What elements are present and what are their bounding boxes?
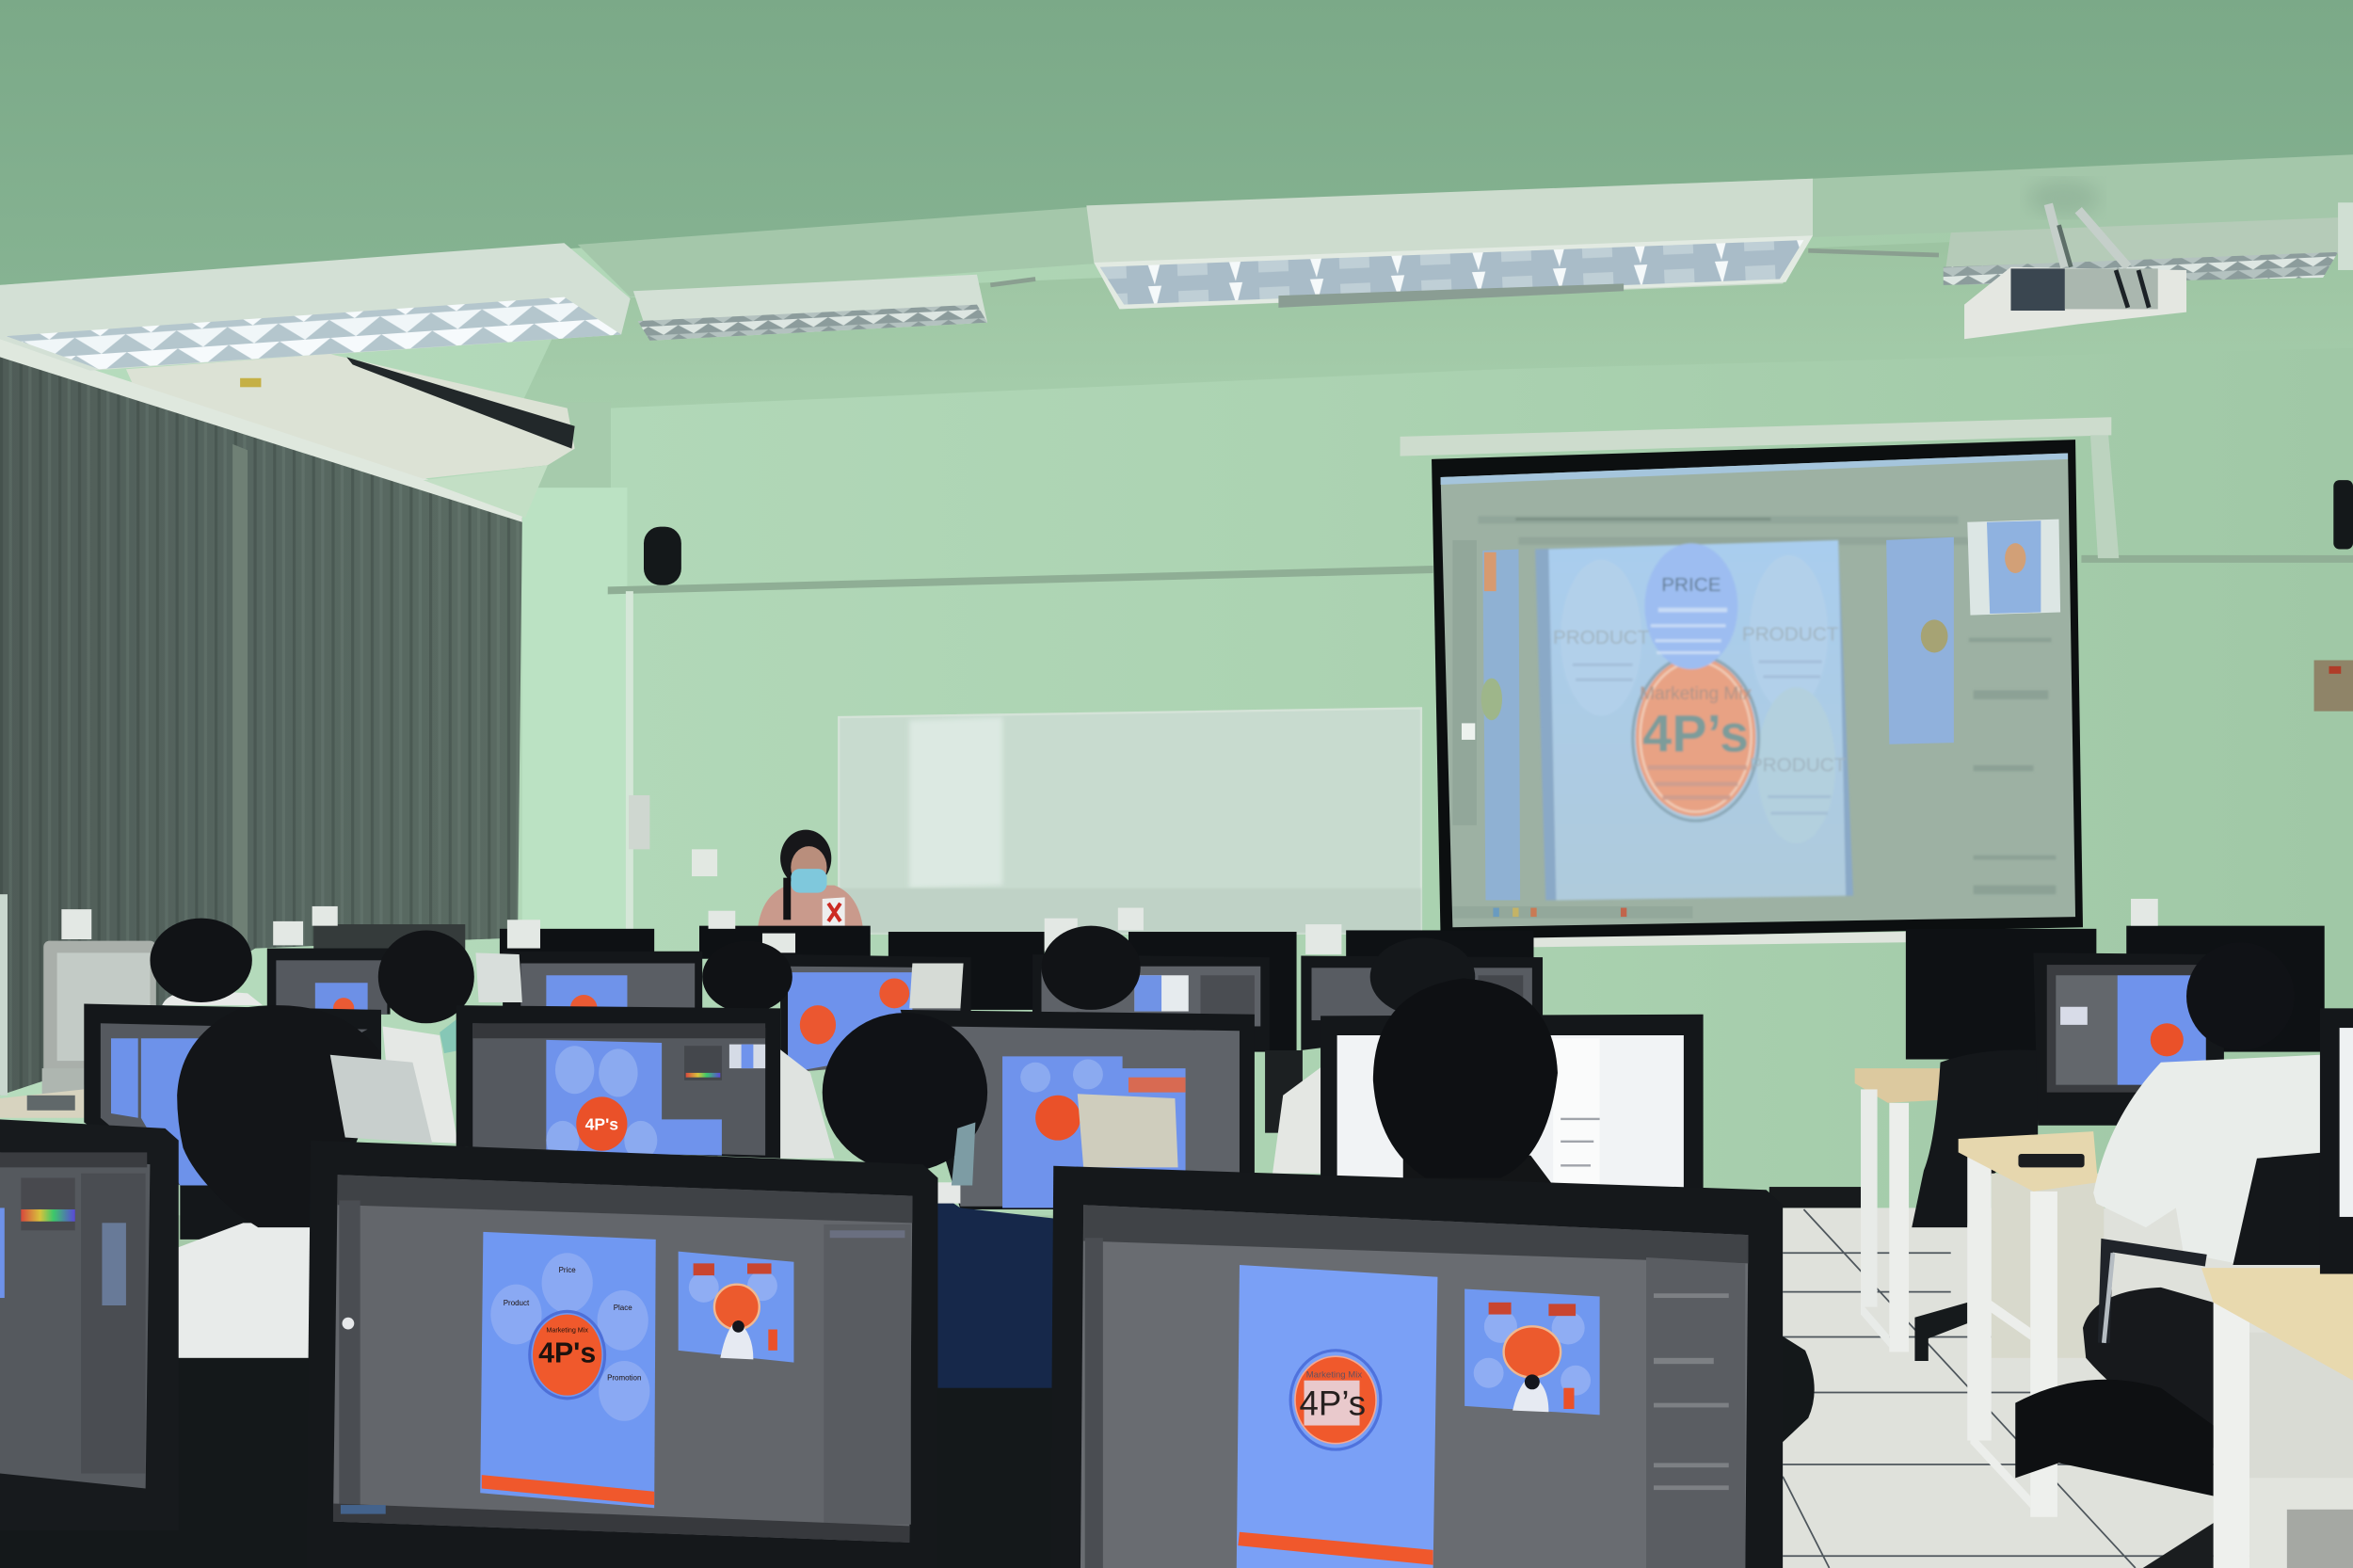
student front left <box>176 1005 381 1368</box>
paper tags on monitors <box>61 899 2158 954</box>
student right <box>2093 942 2325 1263</box>
app toolbar <box>1083 1205 1748 1568</box>
office chair right <box>2015 1152 2325 1568</box>
ceiling <box>0 0 2353 297</box>
mini artboard <box>679 1252 793 1363</box>
screen labels: 4P’s <box>1642 704 1749 763</box>
poster labels: Price <box>559 1266 576 1274</box>
poster labels: Marketing Mix <box>1306 1370 1362 1381</box>
second row monitor 1 <box>267 949 391 1019</box>
second row monitor 2 <box>475 952 702 1022</box>
desk front right <box>2201 1268 2353 1568</box>
right side desk back <box>1855 1068 1944 1352</box>
poster artboard <box>1237 1265 1437 1568</box>
wall moulding <box>608 555 2353 934</box>
second row monitor 4 <box>1032 954 1270 1050</box>
desk middle right <box>1959 1131 2104 1517</box>
student navy <box>823 1013 1053 1396</box>
front monitor centre-right <box>1050 1166 1783 1568</box>
student back left <box>150 919 263 1005</box>
screen toolbar text <box>1478 516 1969 545</box>
front monitor centre-left <box>306 1141 937 1568</box>
floor <box>1769 1187 2353 1568</box>
chair back row right <box>1912 1049 2038 1361</box>
screen taskbar <box>1452 906 1692 919</box>
screen labels: PRICE <box>1661 574 1721 596</box>
student fourth <box>1042 926 1141 1010</box>
second row monitor 5 <box>1301 956 1543 1050</box>
speaker right <box>2333 480 2353 549</box>
third row monitor left <box>84 1004 381 1240</box>
desk chair dark <box>1265 1050 1303 1133</box>
second row monitor 3 <box>780 954 971 1073</box>
translucent paper <box>330 1055 432 1144</box>
screen navigator panel <box>1967 520 2060 616</box>
poster artboard: 4P’s <box>1299 1384 1366 1422</box>
ceiling light middle <box>633 275 987 341</box>
screen labels: PRODUCT <box>1750 754 1847 776</box>
student centre with curly hair <box>1373 978 1558 1185</box>
third row monitor 3 <box>901 1010 1255 1209</box>
poster labels: Promotion <box>607 1374 641 1383</box>
student fifth <box>1273 937 1475 1174</box>
wall sockets <box>629 795 717 876</box>
screen labels <box>1553 574 1847 776</box>
student third <box>702 941 834 1159</box>
poster labels <box>504 1266 641 1383</box>
whiteboard <box>839 708 1421 934</box>
app toolbar <box>333 1175 912 1543</box>
projector screen housing <box>1401 417 2119 558</box>
dark chairs under front row <box>0 1336 1815 1568</box>
ceiling light right <box>1944 202 2353 285</box>
poster labels: Product <box>504 1299 530 1307</box>
curtains <box>0 339 522 1096</box>
student second <box>378 930 474 1144</box>
screen left artboard <box>1481 549 1520 901</box>
back row monitors <box>313 924 2325 1060</box>
screen right artboard <box>1886 537 1954 744</box>
poster labels: Marketing Mix <box>546 1327 588 1335</box>
projection screen <box>1432 440 2083 949</box>
wall switch red box <box>2314 660 2353 712</box>
ceiling light centre <box>1086 179 1813 309</box>
projector <box>1964 180 2186 339</box>
teacher <box>758 830 863 927</box>
desk edge and keyboard left <box>0 1089 84 1118</box>
conduit line <box>990 250 1939 285</box>
speaker left <box>644 527 681 585</box>
third row monitor 2 <box>456 1005 780 1160</box>
old monitor left <box>42 941 156 1098</box>
right monitor <box>2033 952 2224 1126</box>
screen labels: PRODUCT <box>1742 624 1839 646</box>
screen labels: Marketing Mix <box>1640 684 1753 704</box>
screen labels: PRODUCT <box>1553 627 1650 648</box>
mini artboard <box>1465 1288 1600 1415</box>
poster labels: Place <box>614 1304 632 1312</box>
screen tools column <box>1452 540 1477 825</box>
monitor label: 4P's <box>585 1114 618 1133</box>
screen main artboard <box>1535 540 1853 901</box>
wall <box>0 225 2353 1215</box>
screen properties panel <box>1969 638 2056 894</box>
poster labels: 4P's <box>538 1338 596 1369</box>
poster artboard <box>480 1232 656 1508</box>
front monitor left <box>0 1119 179 1530</box>
air conditioner <box>126 354 575 518</box>
edge monitor right <box>2320 1008 2353 1274</box>
ceiling light left <box>0 243 631 371</box>
third row monitor 4 <box>1321 1015 1704 1190</box>
